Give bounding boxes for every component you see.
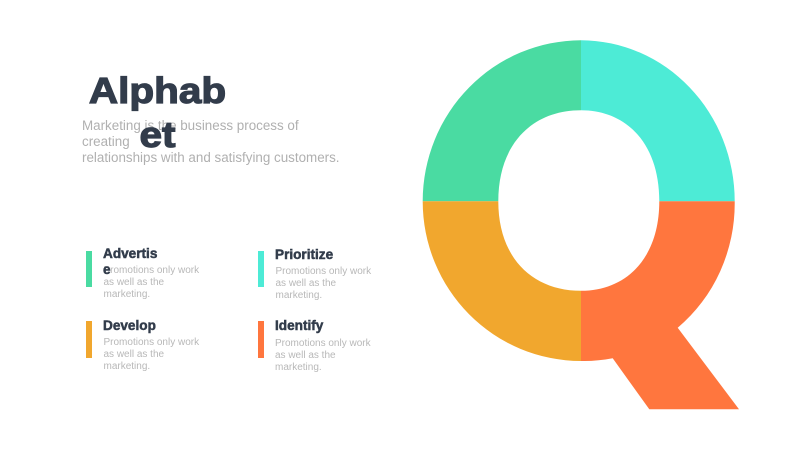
title: Alphab xyxy=(89,70,226,111)
description: as well as the xyxy=(104,276,164,288)
segment: top left green xyxy=(423,40,581,201)
intro paragraph: Marketing is the business process of xyxy=(82,118,299,133)
description: as well as the xyxy=(104,348,164,360)
segment: top right turquoise xyxy=(581,40,735,201)
description xyxy=(104,264,199,300)
color bar: turquoise xyxy=(258,250,264,287)
description: marketing. xyxy=(104,360,150,372)
item: Develop xyxy=(86,318,199,372)
intro paragraph: relationships with and satisfying customers. xyxy=(82,150,340,165)
description: as well as the xyxy=(275,350,336,360)
heading xyxy=(103,246,158,277)
description: marketing. xyxy=(275,362,322,372)
heading: Prioritize xyxy=(275,247,333,262)
heading: e xyxy=(103,262,111,277)
title: et xyxy=(139,114,176,155)
segment: bottom left amber xyxy=(423,201,581,361)
color bar: green xyxy=(86,250,92,287)
description: Promotions only work xyxy=(104,264,199,276)
title xyxy=(89,70,226,155)
intro paragraph: creating xyxy=(82,134,130,149)
item: Advertise xyxy=(86,246,199,300)
description: marketing. xyxy=(104,288,150,300)
heading: Identify xyxy=(275,318,323,333)
description xyxy=(276,266,371,300)
color bar: orange xyxy=(258,321,264,358)
description: Promotions only work xyxy=(275,338,371,348)
description xyxy=(275,338,371,372)
segment: bottom right orange with tail xyxy=(581,201,739,409)
heading: Develop xyxy=(103,318,156,333)
description: as well as the xyxy=(276,278,336,288)
intro paragraph xyxy=(82,118,340,165)
description xyxy=(104,336,199,372)
item: Identify xyxy=(258,318,371,372)
color bar: amber xyxy=(86,321,92,358)
heading: Advertis xyxy=(103,246,157,261)
description: Promotions only work xyxy=(276,266,371,276)
item: Prioritize xyxy=(258,247,371,300)
description: Promotions only work xyxy=(104,336,199,348)
description: marketing. xyxy=(276,290,322,300)
